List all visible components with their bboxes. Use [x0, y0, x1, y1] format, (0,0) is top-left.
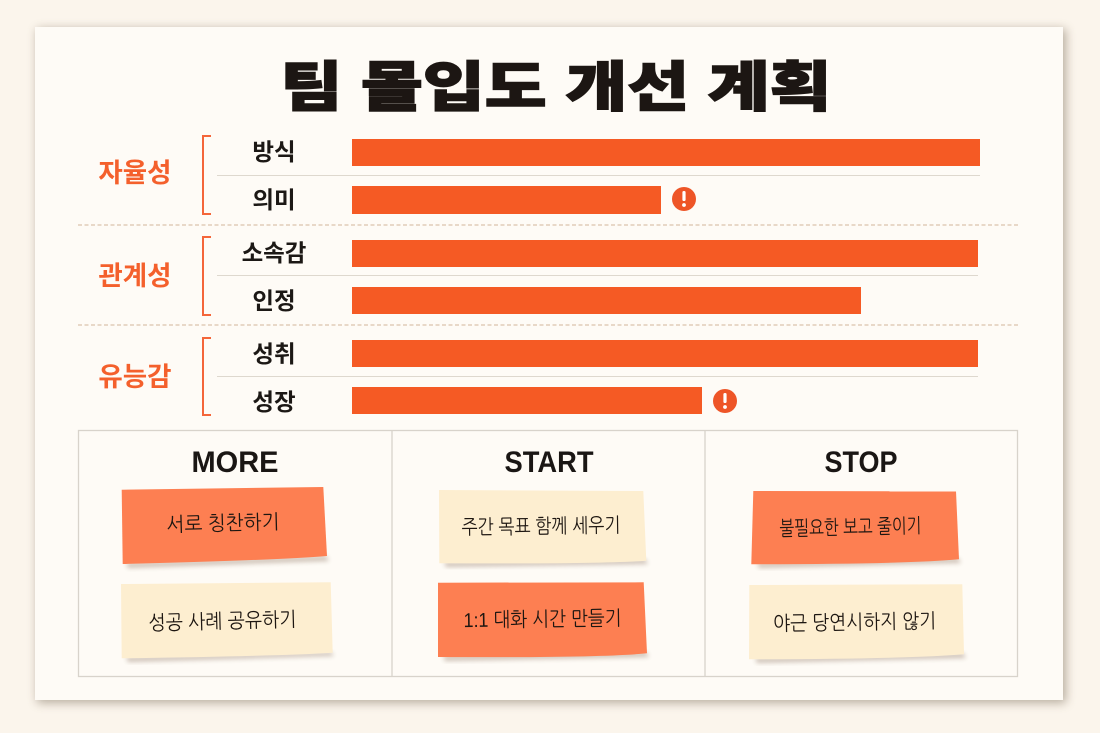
sticky: 야근 당연시하지 않기	[749, 584, 966, 663]
sticky: 1:1 대화 시간 만들기	[438, 582, 649, 661]
sticky: 성공 사례 공유하기: 성공 사례 공유하기	[148, 609, 297, 635]
bracket	[203, 237, 211, 315]
bar: 의미	[352, 186, 661, 214]
sticky: 1:1 대화 시간 만들기: 1:1 대화 시간 만들기	[463, 608, 622, 632]
sticky: 야근 당연시하지 않기: 야근 당연시하지 않기	[773, 611, 936, 635]
bracket	[203, 136, 211, 214]
group label: 유능감: 유능감	[98, 362, 172, 392]
group label: 자율성: 자율성	[98, 158, 172, 188]
sticky: 불필요한 보고 줄이기	[751, 491, 961, 568]
row label: 성장: 성장	[252, 389, 296, 415]
sticky: 서로 칭찬하기: 서로 칭찬하기	[166, 512, 280, 536]
bar: 성장	[352, 387, 702, 414]
panel: 관계성 group	[98, 237, 978, 315]
bar: 소속감	[352, 240, 978, 267]
heading: MORE: MORE	[192, 446, 278, 479]
row label: 인정: 인정	[252, 288, 296, 314]
panel: 자율성 group	[98, 136, 980, 214]
sticky: 불필요한 보고 줄이기: 불필요한 보고 줄이기	[779, 516, 922, 540]
bar: 인정	[352, 287, 861, 314]
title: 팀 몰입도 개선 계획	[280, 58, 832, 118]
icon: warning	[672, 187, 696, 211]
sticky: 서로 칭찬하기	[122, 487, 329, 568]
row label: 방식: 방식	[252, 139, 296, 165]
row label: 성취: 성취	[252, 341, 296, 367]
sticky: 주간 목표 함께 세우기: 주간 목표 함께 세우기	[461, 515, 621, 539]
icon: warning	[713, 389, 737, 413]
row label: 의미: 의미	[252, 187, 296, 213]
panel: 유능감 group	[98, 338, 978, 415]
bracket	[203, 338, 211, 415]
panel: MORE START STOP table	[78, 430, 1018, 677]
bar: 방식	[352, 139, 980, 166]
heading: START: START	[504, 446, 594, 479]
sticky: 주간 목표 함께 세우기	[439, 490, 648, 567]
bar: 성취	[352, 340, 978, 367]
row label: 소속감: 소속감	[242, 240, 306, 266]
heading: STOP: STOP	[824, 446, 898, 479]
group label: 관계성: 관계성	[98, 261, 172, 291]
sticky: 성공 사례 공유하기	[121, 582, 334, 662]
